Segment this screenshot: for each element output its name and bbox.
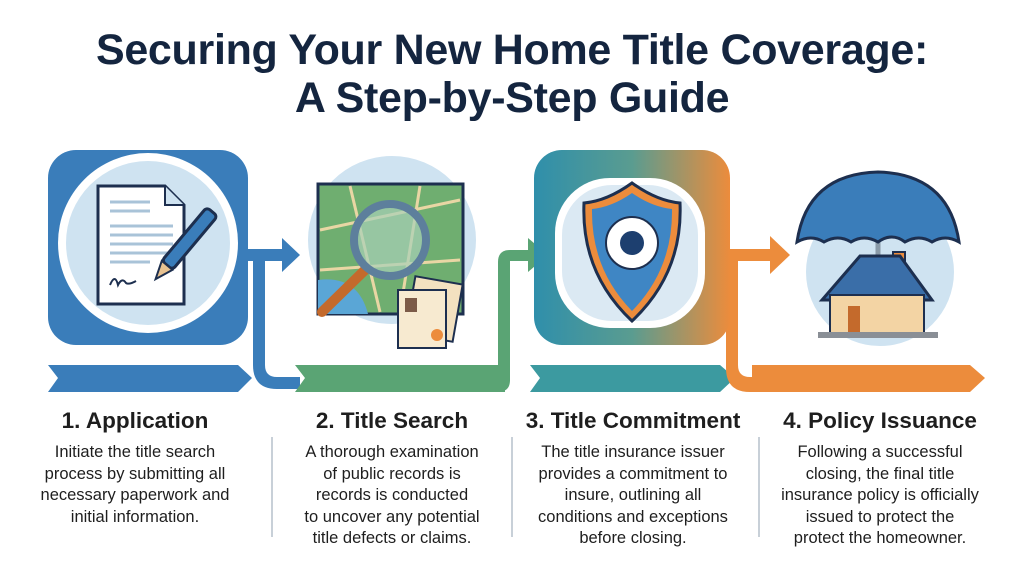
step 1 text: Initiate the title search <box>55 443 215 461</box>
step 2 text: 2. Title Search <box>316 408 468 433</box>
icon: umbrella <box>876 175 880 260</box>
step 4 text <box>781 408 979 547</box>
step 1 text: process by submitting all <box>45 464 225 482</box>
step 3 text: The title insurance issuer <box>541 443 725 461</box>
icon: certificates <box>405 276 463 342</box>
step 4 text: insurance policy is officially <box>781 486 979 504</box>
step 2 text: title defects or claims. <box>313 529 471 547</box>
chevron: teal <box>530 365 735 392</box>
step 1 text: initial information. <box>71 508 199 526</box>
step 4 text: closing, the final title <box>806 464 954 482</box>
step 2 text: A thorough examination <box>305 443 479 461</box>
process diagram <box>48 150 985 392</box>
step 3 text <box>526 408 740 547</box>
icon: document with pen <box>98 186 218 304</box>
step 2 text: to uncover any potential <box>304 508 480 526</box>
step 4 text: issued to protect the <box>806 508 954 526</box>
step 3 text: conditions and exceptions <box>538 508 728 526</box>
step 1 text: 1. Application <box>62 408 208 433</box>
step 4 text: 4. Policy Issuance <box>783 408 977 433</box>
title: Securing Your New Home Title Coverage: <box>96 26 928 74</box>
panel 1: application <box>48 150 248 345</box>
step 4 text: Following a successful <box>797 443 963 461</box>
step 3 text: insure, outlining all <box>565 486 701 504</box>
step 2 text: records is conducted <box>316 486 468 504</box>
panel 3: title commitment <box>534 150 730 345</box>
step 1 text <box>41 408 229 526</box>
title <box>96 26 928 122</box>
step 4 text: protect the homeowner. <box>794 529 966 547</box>
step 2 text: of public records is <box>323 464 461 482</box>
step 1 text: necessary paperwork and <box>41 486 229 504</box>
panel 4: policy issuance icon <box>797 172 959 346</box>
panel 2: title search icon <box>308 156 476 348</box>
chevron: blue <box>48 365 252 392</box>
title: A Step-by-Step Guide <box>295 74 729 122</box>
step 2 text <box>304 408 480 547</box>
step 3 text: 3. Title Commitment <box>526 408 740 433</box>
step 3 text: provides a commitment to <box>539 464 727 482</box>
step 3 text: before closing. <box>579 529 687 547</box>
icon: magnifier <box>322 270 365 312</box>
icon: map <box>318 184 463 314</box>
connector + chevron: orange <box>725 236 985 392</box>
icon: shield with seal <box>584 183 680 321</box>
icon: house <box>893 252 905 272</box>
connector: blue path <box>240 238 300 389</box>
chevron: green with connector <box>295 238 548 392</box>
